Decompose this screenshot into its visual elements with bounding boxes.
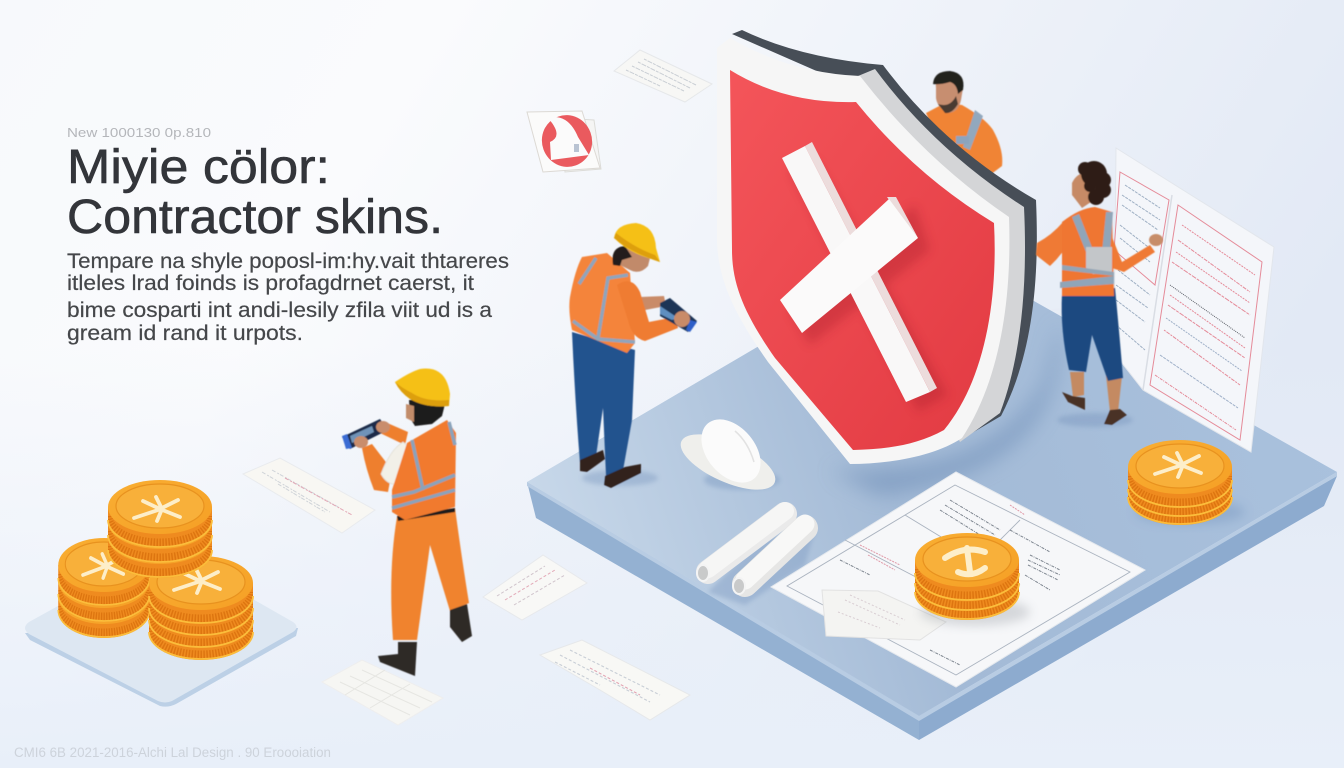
worker forearm (362, 444, 392, 492)
coin emblem (945, 548, 985, 574)
worker device (660, 298, 697, 332)
worker hand (674, 311, 690, 327)
worker camera (342, 419, 388, 449)
rolled pipes on platform (697, 511, 815, 605)
paper: center floor sheet (483, 555, 587, 620)
worker reflective strips (392, 422, 455, 508)
woman shoes (1062, 392, 1127, 425)
coin stacks: left group (58, 480, 253, 660)
top stack (108, 480, 212, 578)
man behind shield (926, 71, 1002, 175)
worker far arm (380, 422, 408, 445)
platform top (527, 244, 1337, 716)
worker sleeve (381, 442, 416, 485)
worker far arm (640, 296, 666, 310)
shield red field (730, 70, 995, 450)
shield grey bevel (858, 69, 1025, 442)
worker with device (569, 223, 697, 488)
shadow under shield (830, 320, 1060, 495)
coin emblem (1155, 453, 1201, 477)
cross mark (780, 142, 937, 402)
description text: gream id rand it urpots. (67, 322, 303, 345)
woman head (1072, 172, 1094, 208)
left stack (58, 538, 150, 638)
platform left side (527, 482, 919, 740)
worker pants (391, 508, 469, 640)
worker vest (392, 420, 456, 520)
small header label: New 1000130 0p.810 (67, 125, 211, 140)
right blueprint sheets (1114, 148, 1274, 452)
worker boots (378, 604, 472, 676)
paper: bottom floor sheet (540, 640, 690, 720)
heading block (67, 125, 509, 345)
worker arm (617, 281, 678, 341)
icon: red sign sheet (527, 108, 601, 174)
hard hat on platform (673, 408, 783, 501)
title: Contractor skins. (67, 191, 443, 244)
shield dark rim (732, 30, 1037, 440)
coin stack: right of platform (1128, 440, 1245, 525)
title (67, 141, 443, 244)
worker jeans (572, 332, 635, 476)
right stack (149, 556, 253, 660)
worker helmet (395, 369, 450, 406)
description text: itleles lrad foinds is profagdrnet caerst, it (67, 272, 474, 295)
worker hands (354, 436, 368, 448)
woman vest straps (1060, 212, 1114, 288)
worker with camera (342, 369, 472, 676)
cross shadow (790, 160, 948, 412)
description text (67, 250, 509, 345)
description text: bime cosparti int andi-lesily zfila viit ud is a (67, 299, 492, 322)
worker vest (569, 253, 635, 353)
worker helmet (614, 223, 660, 262)
description text: Tempare na shyle poposl-im:hy.vait thtareres (67, 250, 509, 273)
woman with plans (1036, 161, 1163, 427)
worker shoes (580, 450, 641, 488)
woman hand (1149, 234, 1163, 246)
left coin base pad (25, 551, 298, 707)
title: Miyie cölor: (67, 141, 330, 194)
worker reflective strips (573, 258, 635, 342)
platform (527, 244, 1337, 740)
blueprint sheet on platform (771, 472, 1145, 687)
footer credit: CMI6 6B 2021-2016-Alchi Lal Design . 90 Eroooiation (14, 745, 331, 760)
woman arms (1036, 222, 1070, 266)
paper: top floating sheet (614, 50, 712, 102)
woman torso (1062, 207, 1114, 296)
small sheet on blueprint (822, 590, 946, 640)
shield white face (717, 38, 1009, 464)
coin stack: center of blueprint (915, 533, 1030, 626)
worker head (409, 400, 446, 426)
woman legs (1070, 372, 1122, 412)
woman capris (1062, 288, 1123, 381)
shield (717, 30, 1037, 464)
worker shadow (582, 470, 658, 486)
worker belt (397, 508, 455, 521)
woman shadow (1057, 413, 1133, 427)
platform right side (919, 476, 1337, 740)
paper: left floor sheet (243, 458, 375, 533)
paper: faint sketch on floor (322, 660, 443, 725)
woman curly hair (1078, 161, 1111, 205)
worker head (613, 247, 650, 272)
